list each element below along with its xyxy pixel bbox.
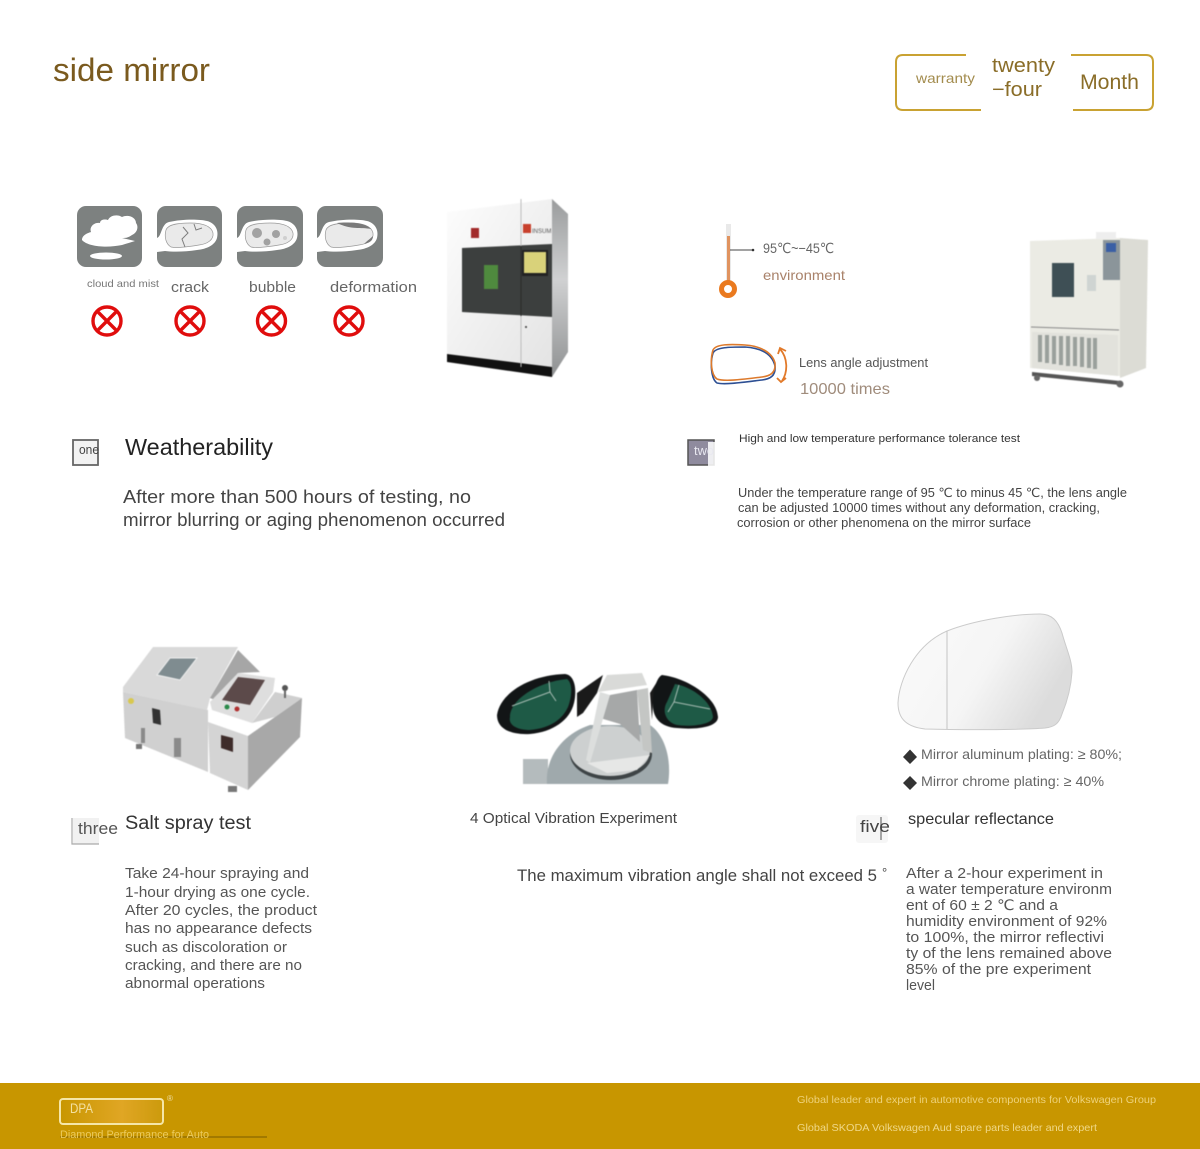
text block: reflectance result: to 100%, the mirror reflectivi: [906, 930, 1104, 946]
text block: reflectance result: [906, 866, 1112, 994]
label: deformation: deformation: [330, 279, 417, 296]
footer text: line one: Global leader and expert in automotive components for Volkswagen Group: [797, 1094, 1156, 1106]
illustration: vibration rig with mirrors: [497, 673, 718, 784]
panel: temperature tolerance: [688, 224, 1148, 530]
text block: salt spray result: such as discoloration or: [125, 939, 287, 956]
illustration: mirror lens: [898, 614, 1072, 730]
text block: reflectance result: humidity environment of 92%: [906, 914, 1107, 930]
warranty badge: [896, 55, 1153, 110]
text block: reflectance result: 85% of the pre experiment: [906, 962, 1091, 978]
text block: vibration result: The maximum vibration angle shall not exceed 5: [517, 866, 877, 885]
panel: salt spray test: [72, 647, 318, 992]
icon: thermometer: [722, 224, 754, 296]
text block: reflectance result: ty of the lens remained above: [906, 946, 1112, 962]
label: environment: environment: [763, 267, 845, 283]
text block: salt spray result: After 20 cycles, the product: [125, 902, 318, 919]
step badge: three: three: [78, 819, 118, 838]
text block: temperature tolerance result: can be adjusted 10000 times without any deformation, cracking,: [738, 501, 1100, 515]
heading: salt spray test: Salt spray test: [125, 813, 252, 834]
heading: optical vibration experiment: 4 Optical Vibration Experiment: [470, 810, 678, 827]
text block: salt spray result: [125, 865, 318, 992]
label: cloud and mist: cloud and mist: [87, 278, 159, 290]
text block: temperature tolerance result: [737, 486, 1127, 530]
illustration: salt spray chamber: [123, 647, 302, 792]
step badge: three: [72, 818, 118, 844]
text block: reflectance result: After a 2-hour experiment in: [906, 866, 1103, 882]
icons: red prohibited marks: [93, 307, 363, 335]
logo tagline: Diamond Performance for Auto: [60, 1129, 209, 1141]
heading: temperature tolerance test: High and low temperature performance tolerance test: [739, 433, 1020, 445]
label: lens angle adjustment: Lens angle adjustment: [799, 355, 928, 370]
icon: lens angle adjustment: [711, 345, 786, 384]
heading: weatherability: Weatherability: [125, 434, 274, 460]
icon: bullet: [903, 750, 917, 764]
text block: reflectance result: ent of 60 ± 2 ℃ and a: [906, 898, 1059, 914]
heading: specular reflectance: specular reflectance: [908, 811, 1054, 828]
illustration: xenon weathering chamber: [447, 199, 568, 377]
panel: weatherability: [73, 199, 568, 530]
label: crack: crack: [171, 279, 210, 296]
text: aluminum plating: Mirror aluminum plating: ≥ 80%;: [921, 746, 1122, 762]
step badge: five: five: [860, 817, 890, 836]
text block: salt spray result: 1-hour drying as one cycle.: [125, 884, 310, 901]
text block: reflectance result: a water temperature environm: [906, 882, 1112, 898]
panel: optical vibration experiment: [470, 673, 887, 885]
illustration: temperature chamber: [1030, 232, 1148, 388]
label: temperature range: 95℃~−45℃: [763, 240, 834, 256]
step badge: five: [856, 815, 890, 843]
text block: salt spray result: abnormal operations: [125, 975, 265, 992]
icon: crack: [157, 206, 222, 267]
warranty badge: −four: [992, 79, 1042, 101]
title: side mirror: [53, 52, 210, 88]
warranty badge: twenty: [992, 55, 1055, 77]
text block: temperature tolerance result: corrosion or other phenomena on the mirror surface: [737, 516, 1031, 530]
label: 10000 times: 10000 times: [800, 381, 890, 398]
warranty badge: Month: [1080, 71, 1139, 94]
footer text: line two: Global SKODA Volkswagen Aud spare parts leader and expert: [797, 1122, 1097, 1134]
text block: salt spray result: Take 24-hour spraying and: [125, 865, 309, 882]
footer band: [0, 1083, 1200, 1149]
warranty badge: warranty: [915, 70, 975, 86]
logo: DPA: ®: [167, 1094, 173, 1103]
step badge: one: [73, 440, 99, 465]
text block: vibration result: °: [882, 865, 887, 880]
text block: weatherability result: mirror blurring or aging phenomenon occurred: [123, 509, 505, 530]
text block: reflectance result: level: [906, 978, 935, 994]
icon: cloud and mist: [77, 206, 142, 267]
illustration: xenon weathering chamber: INSUM: [532, 229, 551, 235]
text block: temperature tolerance result: Under the temperature range of 95 ℃ to minus 45 ℃, the lens angle: [738, 486, 1127, 500]
text block: weatherability result: [123, 486, 505, 530]
label: bubble: bubble: [249, 279, 296, 296]
logo: DPA: DPA: [70, 1100, 94, 1116]
text block: salt spray result: cracking, and there are no: [125, 957, 302, 974]
step badge: one: one: [79, 443, 99, 457]
icon: bubble: [237, 206, 303, 267]
text block: salt spray result: has no appearance defects: [125, 920, 312, 937]
text: chrome plating: Mirror chrome plating: ≥ 40%: [921, 773, 1104, 789]
icon: deformation: [317, 206, 383, 267]
step badge: two: two: [694, 443, 714, 458]
step badge: two: [688, 440, 716, 466]
text block: weatherability result: After more than 500 hours of testing, no: [123, 486, 471, 507]
logo: DPA: [60, 1094, 173, 1124]
icon: bullet: [903, 776, 917, 790]
panel: specular reflectance: [856, 614, 1122, 994]
